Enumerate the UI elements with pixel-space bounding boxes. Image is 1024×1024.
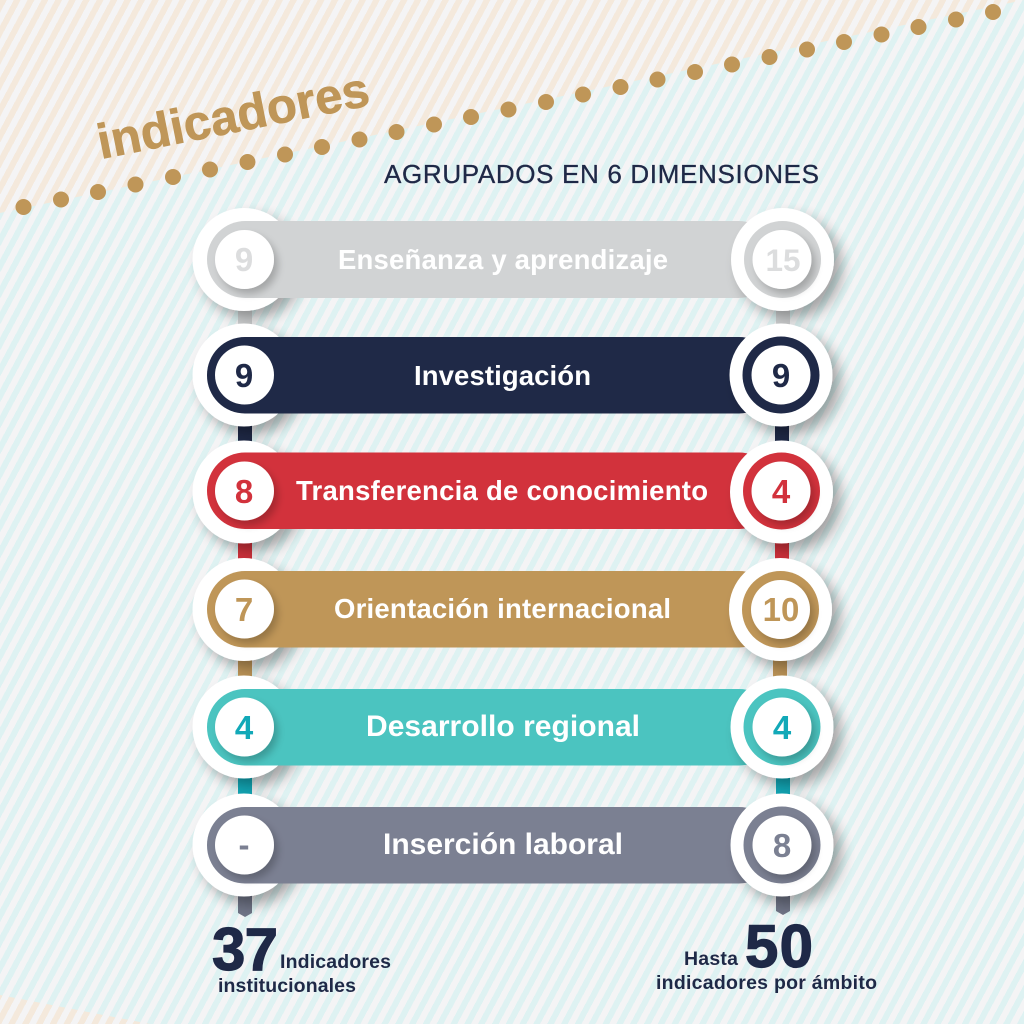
dotted diagonal line	[16, 4, 1001, 215]
right number: 10	[763, 591, 799, 628]
right white disc	[731, 208, 834, 311]
right number: 15	[765, 242, 801, 278]
right number disc	[752, 462, 810, 520]
right number disc	[752, 816, 812, 874]
left number: 9	[235, 357, 253, 394]
right white disc	[730, 324, 832, 426]
right white disc	[729, 558, 832, 661]
right number disc	[751, 580, 810, 639]
footer right: hasta 50 indicadores por ámbito	[656, 913, 877, 994]
label: Desarrollo regional	[366, 710, 640, 743]
caption Hasta: Hasta	[684, 948, 738, 970]
left white disc	[192, 558, 296, 661]
left white disc	[192, 440, 296, 544]
right ring	[743, 452, 820, 530]
left number: 9	[235, 241, 253, 278]
row: Orientación internacional	[192, 558, 832, 661]
label: Investigación	[414, 360, 591, 391]
right white disc	[730, 440, 833, 544]
label: Inserción laboral	[383, 828, 623, 861]
right ring	[742, 336, 820, 414]
left number disc	[215, 816, 274, 874]
bar	[207, 689, 777, 766]
right white disc	[730, 676, 834, 778]
caption line 2: institucionales	[218, 975, 356, 997]
right number disc	[752, 346, 810, 404]
left number disc	[215, 230, 274, 289]
left white disc	[192, 324, 296, 426]
row: Desarrollo regional	[192, 676, 834, 778]
bar	[207, 221, 777, 298]
bar	[207, 452, 777, 529]
caption line 2: indicadores por ámbito	[656, 972, 877, 994]
left number disc	[215, 698, 274, 756]
big number 50: 50	[745, 913, 813, 980]
big number 37: 37	[212, 916, 278, 983]
left white disc	[192, 794, 296, 896]
right ring	[742, 571, 819, 648]
left number: 8	[235, 473, 253, 510]
left number disc	[215, 346, 274, 404]
right number: 4	[773, 709, 792, 746]
caption line 1: Indicadores	[280, 951, 391, 973]
label: Transferencia de conocimiento	[296, 475, 708, 506]
left number: 7	[235, 591, 253, 628]
bar	[207, 807, 777, 884]
left number: 4	[235, 709, 254, 746]
right number disc	[752, 698, 812, 756]
title: indicadores	[93, 63, 374, 170]
left white disc	[192, 676, 296, 778]
row: Transferencia de conocimiento	[192, 440, 833, 544]
left number: -	[238, 826, 250, 863]
row: Enseñanza y aprendizaje	[192, 208, 834, 311]
background: tan striped band	[0, 0, 1023, 213]
left white disc	[192, 208, 296, 311]
bar	[207, 571, 777, 648]
right ring	[744, 806, 820, 884]
right number: 4	[772, 473, 791, 510]
right ring	[744, 688, 820, 766]
right white disc	[730, 794, 834, 896]
row: Inserción laboral	[192, 794, 834, 896]
left number disc	[215, 462, 274, 520]
footer left: 37 indicadores institucionales	[212, 916, 391, 997]
label: Enseñanza y aprendizaje	[338, 244, 668, 275]
right number: 8	[773, 827, 791, 864]
label: Orientación internacional	[334, 593, 671, 624]
right number: 9	[772, 357, 790, 394]
row: Investigación	[192, 324, 832, 426]
subtitle: AGRUPADOS EN 6 DIMENSIONES	[384, 159, 819, 189]
right ring	[744, 221, 821, 298]
background: tan striped corner	[0, 995, 149, 1024]
left number disc	[215, 580, 274, 638]
bar	[207, 337, 777, 414]
connectors	[238, 305, 790, 917]
right number disc	[752, 230, 812, 289]
